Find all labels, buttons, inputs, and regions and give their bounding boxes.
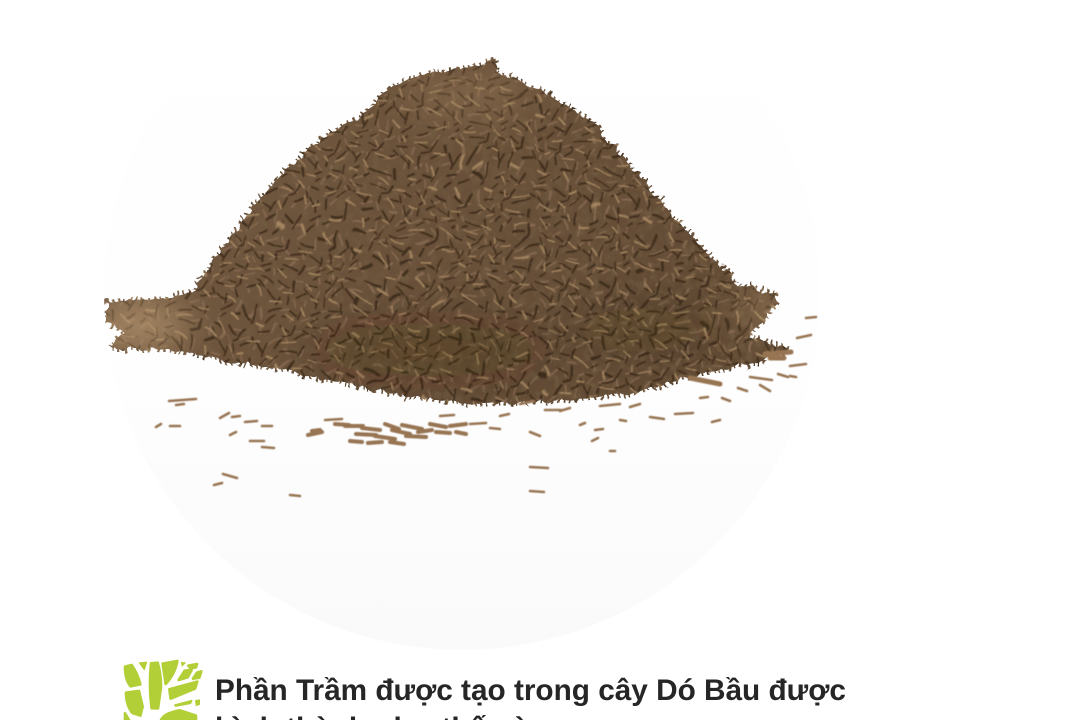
white circular photo background xyxy=(104,0,820,650)
logo: green tree xyxy=(125,661,201,720)
infographic canvas xyxy=(104,56,845,720)
illustration: photo of agarwood powder pile and logo xyxy=(104,56,818,720)
tonal shading of pile xyxy=(90,75,796,376)
heading text: Phần Trầm được tạo trong cây Dó Bầu được xyxy=(215,674,846,707)
powder pile xyxy=(104,56,818,498)
scattered powder flakes xyxy=(156,317,816,496)
